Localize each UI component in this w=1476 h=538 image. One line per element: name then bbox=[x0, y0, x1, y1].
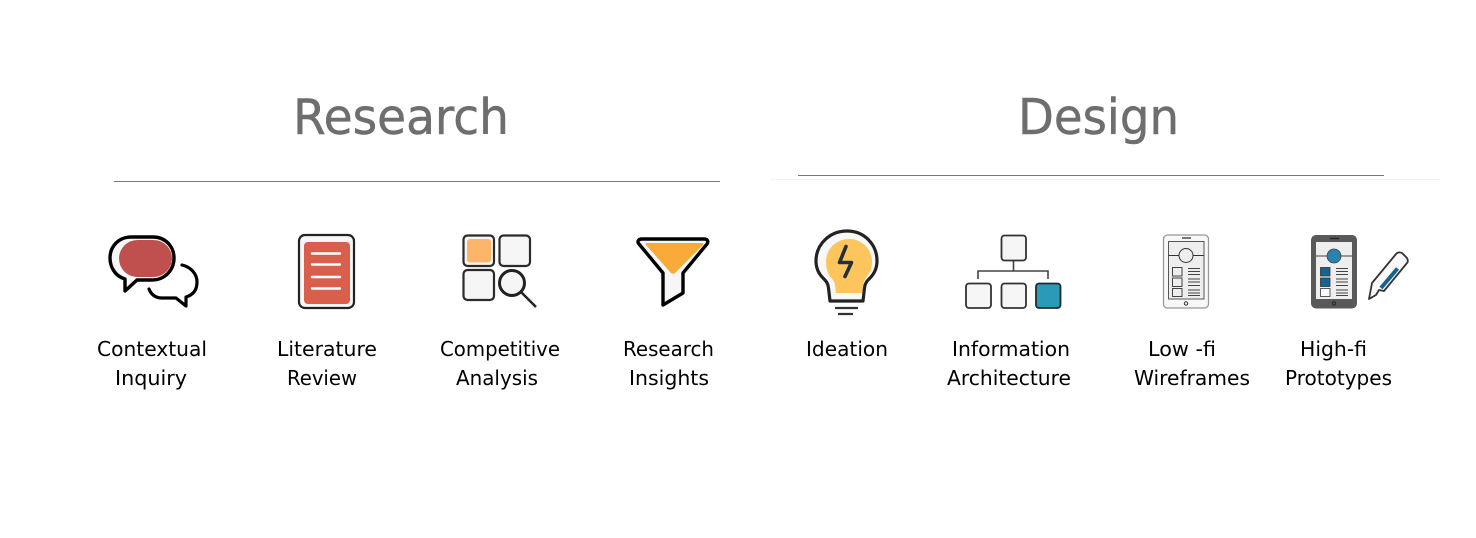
icon: literature review document bbox=[299, 235, 354, 308]
label: Literature Review bbox=[277, 337, 377, 390]
label: Contextual Inquiry bbox=[97, 337, 207, 390]
label: Literature Review: Review bbox=[287, 366, 357, 390]
label: Ideation: Ideation bbox=[806, 337, 888, 361]
label: Low-fi Wireframes: Low -fi bbox=[1148, 337, 1216, 361]
icon: information architecture tree bbox=[966, 236, 1060, 308]
label: Contextual Inquiry: Inquiry bbox=[115, 366, 187, 390]
label: Information Architecture: Architecture bbox=[947, 366, 1071, 390]
label: Competitive Analysis: Analysis bbox=[456, 366, 538, 390]
label: Competitive Analysis bbox=[440, 337, 560, 390]
label: Low-fi Wireframes: Wireframes bbox=[1134, 366, 1250, 390]
label: High-fi Prototypes: High-fi bbox=[1300, 337, 1367, 361]
label: Research Insights: Research bbox=[623, 337, 714, 361]
icon: high-fi prototype tablet and pencil bbox=[1311, 235, 1408, 308]
icon: contextual inquiry speech bubbles bbox=[110, 237, 197, 306]
label: Competitive Analysis: Competitive bbox=[440, 337, 560, 361]
label: Contextual Inquiry: Contextual bbox=[97, 337, 207, 361]
label: Literature Review: Literature bbox=[277, 337, 377, 361]
label: Low-fi Wireframes bbox=[1134, 337, 1250, 390]
label: Information Architecture: Information bbox=[952, 337, 1070, 361]
label: Research Insights bbox=[623, 337, 714, 390]
label: Research Insights: Insights bbox=[629, 366, 709, 390]
icon: competitive analysis grid and magnifier bbox=[464, 236, 536, 307]
label: High-fi Prototypes: Prototypes bbox=[1285, 366, 1392, 390]
label: High-fi Prototypes bbox=[1285, 337, 1392, 390]
label: Information Architecture bbox=[947, 337, 1071, 390]
icon: ideation light bulb bbox=[816, 231, 877, 314]
icon: low-fi wireframe tablet bbox=[1164, 235, 1208, 308]
title: Research: Research bbox=[293, 89, 509, 146]
title: Design: Design bbox=[1018, 89, 1179, 146]
icon: research insights funnel bbox=[638, 239, 708, 305]
